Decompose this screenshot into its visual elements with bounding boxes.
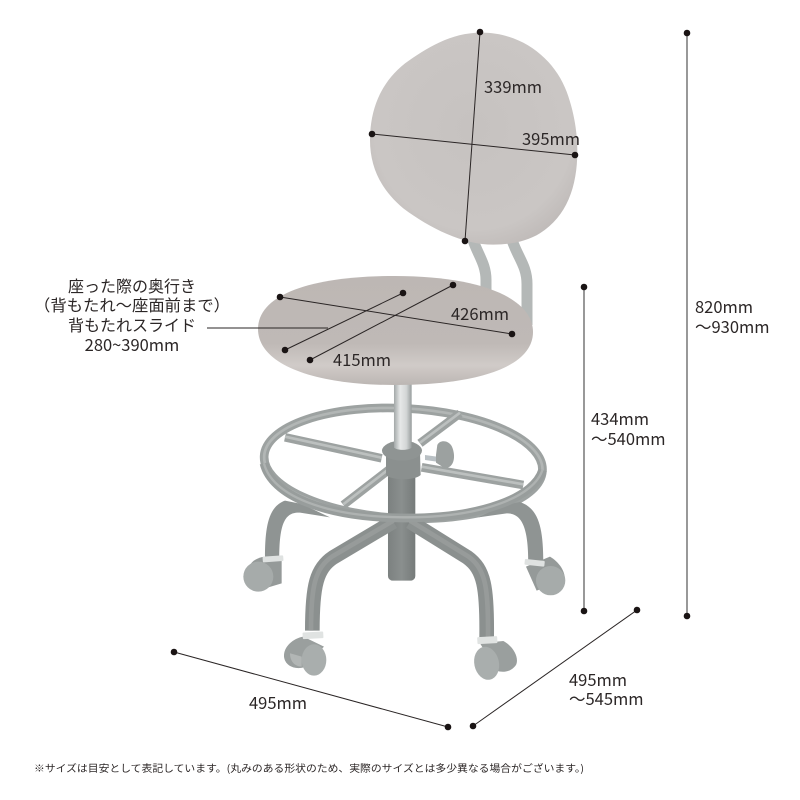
chair back supports — [473, 240, 527, 325]
center column — [388, 473, 415, 581]
label: seat width: 426mm — [451, 301, 509, 325]
back of foot ring — [261, 401, 545, 526]
label: sitting depth and backrest slide: （背もたれ～座面前まで） — [34, 292, 230, 316]
dimension: base depth — [470, 607, 640, 729]
footnote: ※サイズは目安として表記しています。(丸みのある形状のため、実際のサイズとは多少異なる場合がございます。) — [34, 760, 584, 775]
label: backrest height: 339mm — [484, 74, 542, 98]
label: sitting depth and backrest slide — [34, 273, 230, 356]
front right caster — [471, 636, 517, 682]
chair seat — [258, 276, 533, 385]
label: sitting depth and backrest slide: 背もたれスライド — [68, 312, 196, 336]
dimension: backrest width — [369, 131, 578, 158]
leader line — [207, 327, 328, 329]
dimension: base width — [171, 649, 451, 730]
ring spokes — [285, 413, 523, 505]
label: total height: ～930mm — [695, 314, 770, 338]
dimension: seat height — [581, 284, 587, 614]
label: total height — [695, 294, 770, 338]
height adjustment knob — [425, 441, 454, 468]
column collar — [382, 441, 422, 479]
front legs — [311, 521, 488, 638]
label: base width: 495mm — [249, 690, 307, 714]
label: base depth — [569, 667, 644, 710]
rear caster left — [243, 555, 284, 592]
label: sitting depth and backrest slide: 280~390mm — [85, 332, 179, 356]
dimension: backrest height — [462, 29, 483, 244]
dimension: total height — [684, 30, 690, 619]
label: seat depth: 415mm — [333, 347, 391, 371]
back legs — [265, 501, 543, 563]
rear caster right — [524, 557, 565, 595]
front of foot ring — [264, 463, 543, 518]
gas lift post — [394, 383, 412, 449]
label: seat height: ～540mm — [591, 426, 666, 450]
chair backrest — [370, 33, 577, 245]
dimension: seat depth — [307, 282, 456, 363]
chair base — [243, 383, 565, 682]
label: total height: 820mm — [695, 294, 753, 318]
label: base depth: ～545mm — [569, 686, 644, 710]
post base — [394, 413, 412, 450]
label: backrest width: 395mm — [522, 126, 580, 150]
front left caster — [284, 631, 326, 676]
dimension: seat width — [277, 294, 515, 337]
label: base depth: 495mm — [569, 667, 627, 691]
label: sitting depth and backrest slide: 座った際の奥行き — [68, 273, 196, 297]
label: seat height: 434mm — [591, 406, 649, 430]
dimension: sitting depth — [282, 290, 406, 353]
label: seat height — [591, 406, 666, 450]
